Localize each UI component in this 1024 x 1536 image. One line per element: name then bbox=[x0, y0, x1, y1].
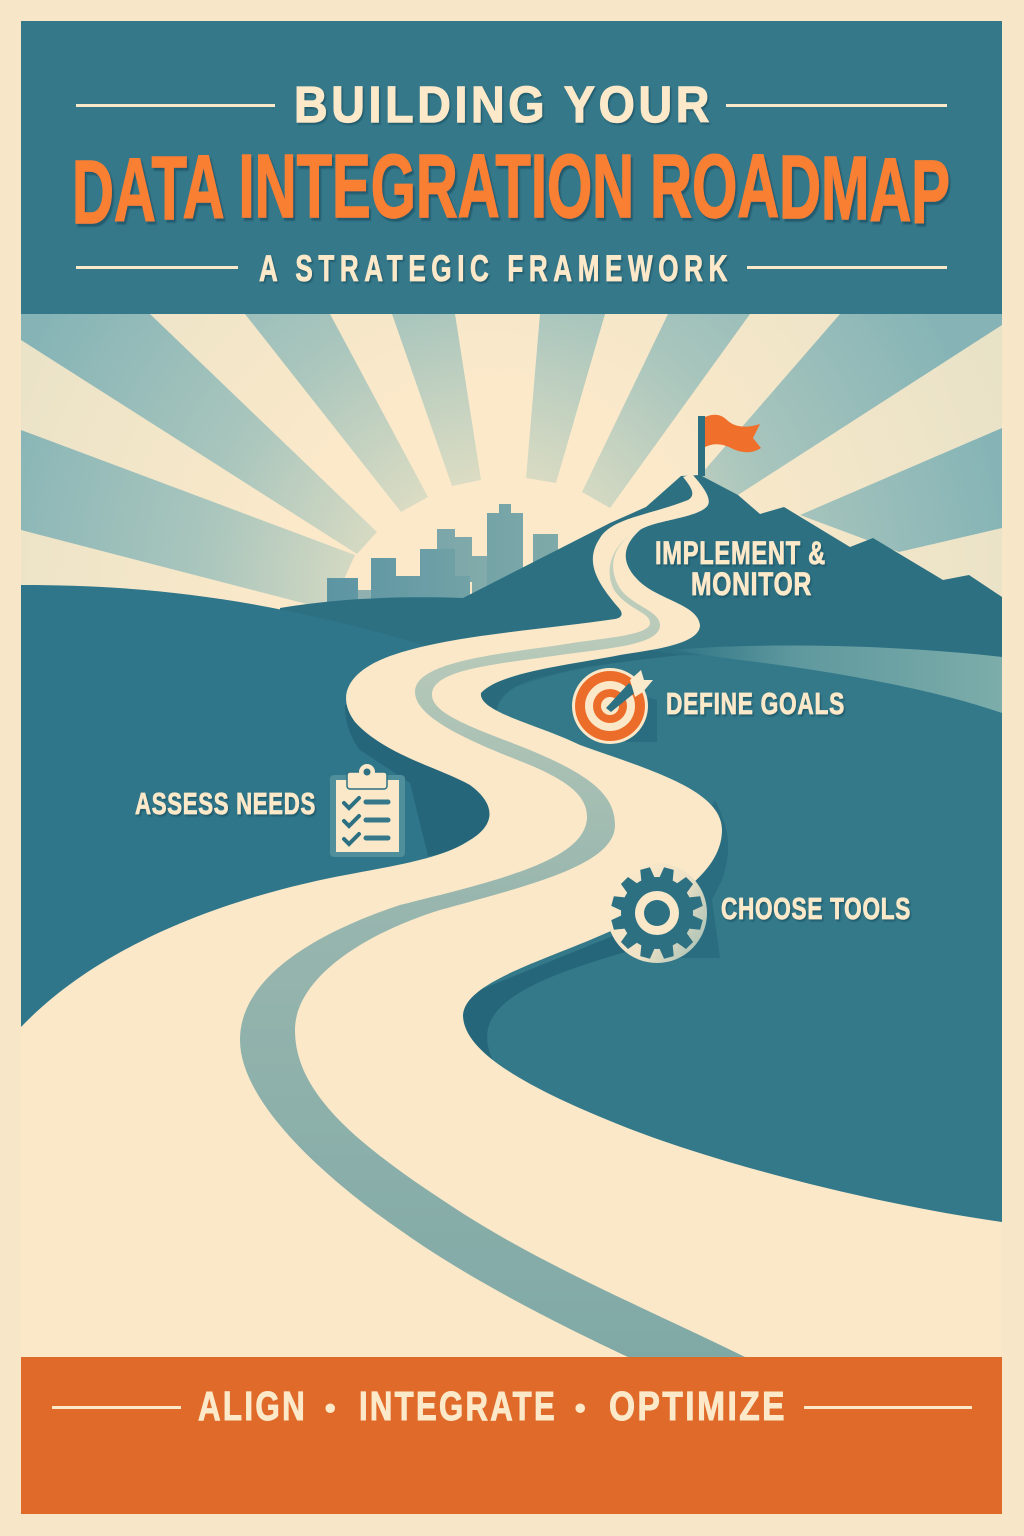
city skyline bbox=[327, 504, 558, 618]
subtitle: A STRATEGIC FRAMEWORK bbox=[259, 248, 733, 289]
panel: header bbox=[21, 21, 1002, 314]
road centre stripe bbox=[240, 535, 745, 1357]
light ribbon on right hill bbox=[672, 646, 1002, 713]
flag on summit bbox=[698, 415, 761, 476]
label: implement and monitor: IMPLEMENT & bbox=[655, 535, 826, 571]
left hill bbox=[21, 585, 440, 1040]
shadow: top pocket under road bbox=[470, 645, 680, 722]
label: define goals: DEFINE GOALS bbox=[666, 686, 845, 721]
label: choose tools: CHOOSE TOOLS bbox=[721, 891, 911, 926]
footer tagline bbox=[198, 1383, 787, 1429]
panel: footer bbox=[21, 1357, 1002, 1514]
right field bbox=[470, 655, 1002, 1240]
footer tagline: ALIGN bbox=[198, 1383, 307, 1429]
footer tagline: • bbox=[575, 1392, 586, 1425]
scene: sunrise sky bbox=[21, 314, 1002, 614]
label: assess needs: ASSESS NEEDS bbox=[135, 786, 316, 821]
icon: clipboard checklist bbox=[330, 764, 405, 857]
heading: building your: BUILDING YOUR bbox=[294, 76, 713, 133]
shadow: lower pocket under road bbox=[455, 925, 650, 1065]
footer tagline: • bbox=[325, 1392, 336, 1425]
shadow: behind gear bbox=[640, 800, 728, 958]
icon: gear bbox=[607, 863, 707, 963]
label: implement and monitor: MONITOR bbox=[691, 566, 812, 602]
footer tagline: OPTIMIZE bbox=[609, 1383, 787, 1429]
mountain with summit bbox=[280, 475, 1002, 720]
icon: target with arrow bbox=[572, 668, 657, 744]
footer tagline: INTEGRATE bbox=[359, 1383, 557, 1429]
shadow: left pocket under road bbox=[345, 700, 505, 856]
label: implement and monitor bbox=[655, 535, 826, 602]
heading: data integration roadmap: DATA INTEGRATION ROADMAP bbox=[72, 137, 950, 243]
winding road bbox=[21, 474, 1002, 1357]
